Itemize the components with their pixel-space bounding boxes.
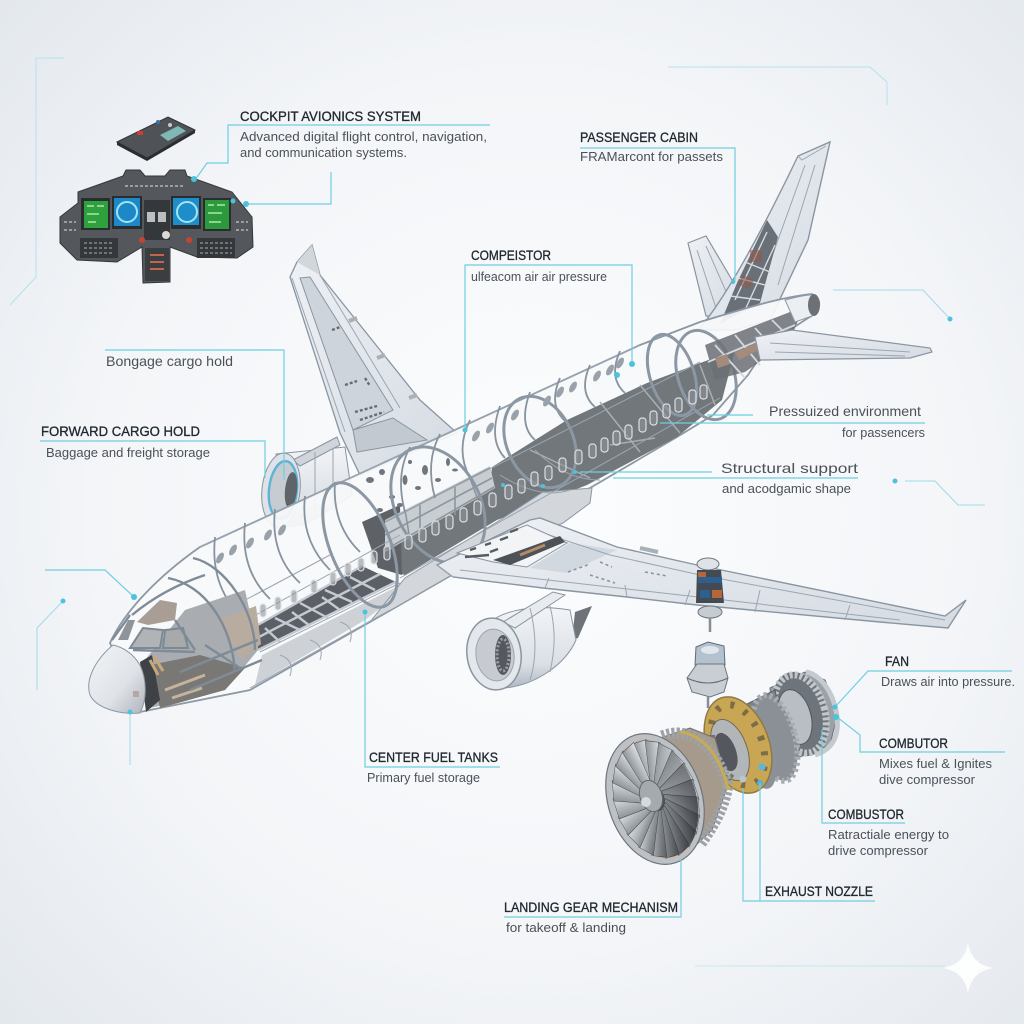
stringers (170, 345, 720, 688)
fan casing (660, 728, 728, 860)
callout: cockpit avionics system (191, 109, 490, 207)
illustration: cockpit interior (112, 558, 262, 712)
illustration: nose cone (89, 645, 145, 713)
callout: baggage cargo hold: Bongage cargo hold (106, 353, 233, 369)
illustration: vertical tail fin (698, 142, 830, 330)
callout: cockpit avionics system: Advanced digital flight control, navigation, (240, 130, 487, 144)
floating overhead panel (117, 117, 195, 161)
illustration: far engine (258, 437, 352, 529)
wing cutaway (457, 525, 567, 567)
callout: forward cargo hold (40, 424, 265, 478)
ribs upper (214, 351, 625, 615)
callout: cockpit avionics system: COCKPIT AVIONICS SYSTEM (240, 109, 421, 124)
cockpit frames (112, 558, 262, 690)
speckled wing-box interior (366, 458, 458, 512)
callout: landing gear mechanism: LANDING GEAR MECHANISM (504, 900, 678, 915)
gold combustor ring (692, 687, 784, 803)
illustration: fuselage shell (110, 294, 820, 712)
callout: combustor lower: drive compressor (828, 844, 928, 858)
illustration: near engine (462, 592, 592, 693)
callout: passenger cabin (580, 130, 735, 284)
centre stack and side panels (64, 186, 248, 281)
callout: combutor upper: COMBUTOR (879, 736, 948, 751)
callout: passenger cabin: PASSENGER CABIN (580, 130, 698, 145)
callout: structural support: and acodgamic shape (722, 482, 851, 496)
illustration: engine sub component (687, 642, 728, 708)
callout: combustor lower: Ratractiale energy to (828, 828, 949, 842)
callout: exhaust nozzle (743, 783, 875, 901)
callout: forward cargo hold: FORWARD CARGO HOLD (41, 424, 200, 439)
frame rings (307, 323, 747, 617)
callout: combutor upper (833, 714, 1005, 787)
callout leaders: unlabelled right side markers (833, 290, 985, 505)
callout: center fuel tanks: CENTER FUEL TANKS (369, 750, 498, 765)
callout: pressurized environment: Pressuized environment (769, 403, 921, 419)
main console (60, 170, 253, 283)
callout: fan (832, 654, 1015, 710)
ribs lower (280, 450, 600, 676)
illustration: near wing (437, 518, 966, 628)
callout leaders: nose markers (37, 570, 137, 765)
windshield panels (118, 620, 188, 648)
illustration: near horizontal stabiliser (755, 330, 932, 360)
illustration: far horizontal stabiliser (688, 236, 738, 316)
lattice strip beside far wing root (385, 466, 495, 552)
callout: combustor lower (822, 730, 949, 858)
wing-body fairing (370, 488, 592, 622)
callout: passenger cabin: FRAMarcont for passets (580, 150, 723, 164)
callout: compressor (462, 248, 635, 432)
dark cabin floor band (375, 350, 735, 575)
callout: landing gear mechanism (504, 860, 681, 935)
callout: combustor lower: COMBUSTOR (828, 807, 904, 822)
callout: compressor: COMPEISTOR (471, 248, 551, 263)
callout: combutor upper: Mixes fuel & Ignites (879, 757, 992, 771)
callout: fan: Draws air into pressure. (881, 675, 1015, 689)
icon: sparkle (943, 943, 993, 993)
callout: exhaust nozzle: EXHAUST NOZZLE (765, 884, 873, 899)
callout: pressurized environment: for passencers (842, 426, 925, 440)
callout: forward cargo hold: Baggage and freight storage (46, 446, 210, 460)
callout: center fuel tanks (362, 610, 500, 785)
lower windows row (260, 385, 707, 617)
callout: baggage cargo hold (105, 350, 284, 480)
belly section (255, 578, 420, 685)
illustration: exploded turbofan (590, 665, 838, 877)
illustration: cockpit instrument panel (60, 117, 253, 283)
callout: fan: FAN (885, 654, 909, 669)
illustration: far wing (290, 245, 457, 475)
forward floor grid (256, 566, 396, 650)
callout: landing gear mechanism: for takeoff & landing (506, 921, 626, 935)
illustration: wing module exploded (696, 558, 724, 632)
callout: combutor upper: dive compressor (879, 773, 975, 787)
fan blades (597, 728, 715, 870)
fan face (590, 721, 720, 877)
middle drum (732, 690, 806, 793)
tail section detail (705, 312, 800, 380)
upper windows (214, 356, 626, 565)
rear cylinder (763, 665, 838, 763)
callout: center fuel tanks: Primary fuel storage (367, 771, 480, 785)
primary and nav screens (81, 196, 231, 231)
callout: structural support (501, 460, 858, 496)
callout: pressurized environment (660, 403, 925, 440)
callout: compressor: ulfeacom air air pressure (471, 270, 607, 284)
callout: cockpit avionics system: and communication systems. (240, 146, 407, 160)
callout: structural support: Structural support (721, 460, 858, 476)
